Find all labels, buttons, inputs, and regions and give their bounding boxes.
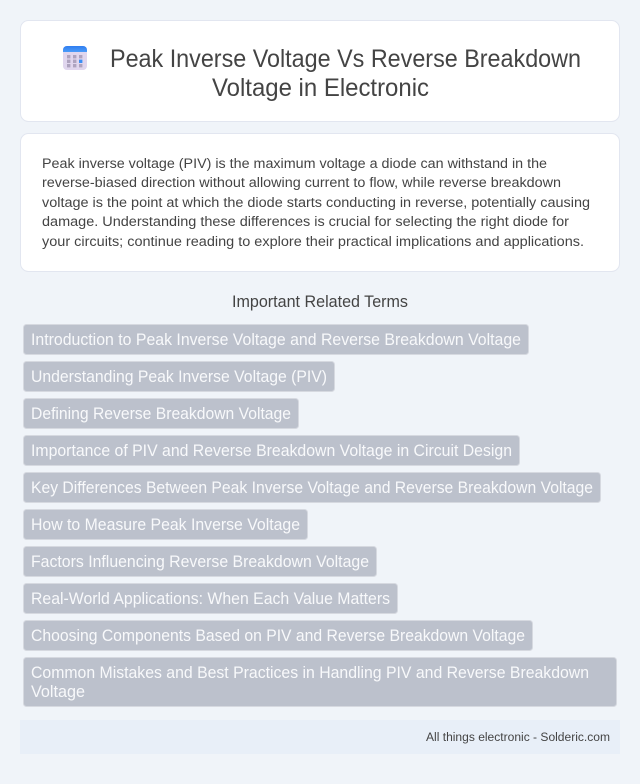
- term 10: Common Mistakes and Best Practices in Handling PIV and Reverse Breakdown: [31, 664, 589, 682]
- term 5: [24, 472, 600, 502]
- summary text: damage. Understanding these differences is crucial for selecting the right diode for: [42, 214, 569, 230]
- title: Voltage in Electronic: [212, 74, 429, 102]
- footer: All things electronic - Solderic.com: [426, 730, 610, 744]
- term 4: [24, 436, 520, 466]
- list of related terms: [24, 324, 616, 706]
- term 5: Key Differences Between Peak Inverse Voltage and Reverse Breakdown Voltage: [31, 479, 593, 497]
- panel: summary card: [20, 134, 620, 272]
- term 9: [24, 620, 532, 650]
- title: [110, 45, 581, 102]
- title: Peak Inverse Voltage Vs Reverse Breakdown: [110, 45, 581, 73]
- summary text: Peak inverse voltage (PIV) is the maximum voltage a diode can withstand in the: [42, 156, 547, 172]
- term 10: [24, 658, 616, 706]
- term 7: Factors Influencing Reverse Breakdown Voltage: [31, 553, 369, 571]
- term 2: Understanding Peak Inverse Voltage (PIV): [31, 368, 327, 386]
- term 1: Introduction to Peak Inverse Voltage and Reverse Breakdown Voltage: [31, 331, 521, 349]
- term 7: [24, 546, 376, 576]
- term 2: [24, 362, 334, 392]
- panel: title card: [20, 20, 620, 122]
- summary text: your circuits; continue reading to explore their practical implications and applications.: [42, 234, 584, 250]
- footer: [20, 720, 620, 754]
- term 3: Defining Reverse Breakdown Voltage: [31, 405, 291, 423]
- term 9: Choosing Components Based on PIV and Reverse Breakdown Voltage: [31, 627, 525, 645]
- summary text: voltage is the point at which the diode starts conducting in reverse, potentially causing: [42, 195, 590, 211]
- term 8: [24, 584, 398, 614]
- summary text: [42, 156, 590, 250]
- term 6: How to Measure Peak Inverse Voltage: [31, 516, 300, 534]
- term 8: Real-World Applications: When Each Value Matters: [31, 590, 390, 608]
- icon: calendar: [63, 46, 87, 70]
- summary text: reverse-biased direction without allowing current to flow, while reverse breakdown: [42, 175, 561, 191]
- term 10: Voltage: [31, 683, 85, 701]
- term 3: [24, 398, 298, 428]
- term 4: Importance of PIV and Reverse Breakdown Voltage in Circuit Design: [31, 442, 512, 460]
- term 1: [24, 324, 528, 354]
- term 6: [24, 510, 308, 540]
- heading: important related terms: Important Related Terms: [232, 293, 408, 311]
